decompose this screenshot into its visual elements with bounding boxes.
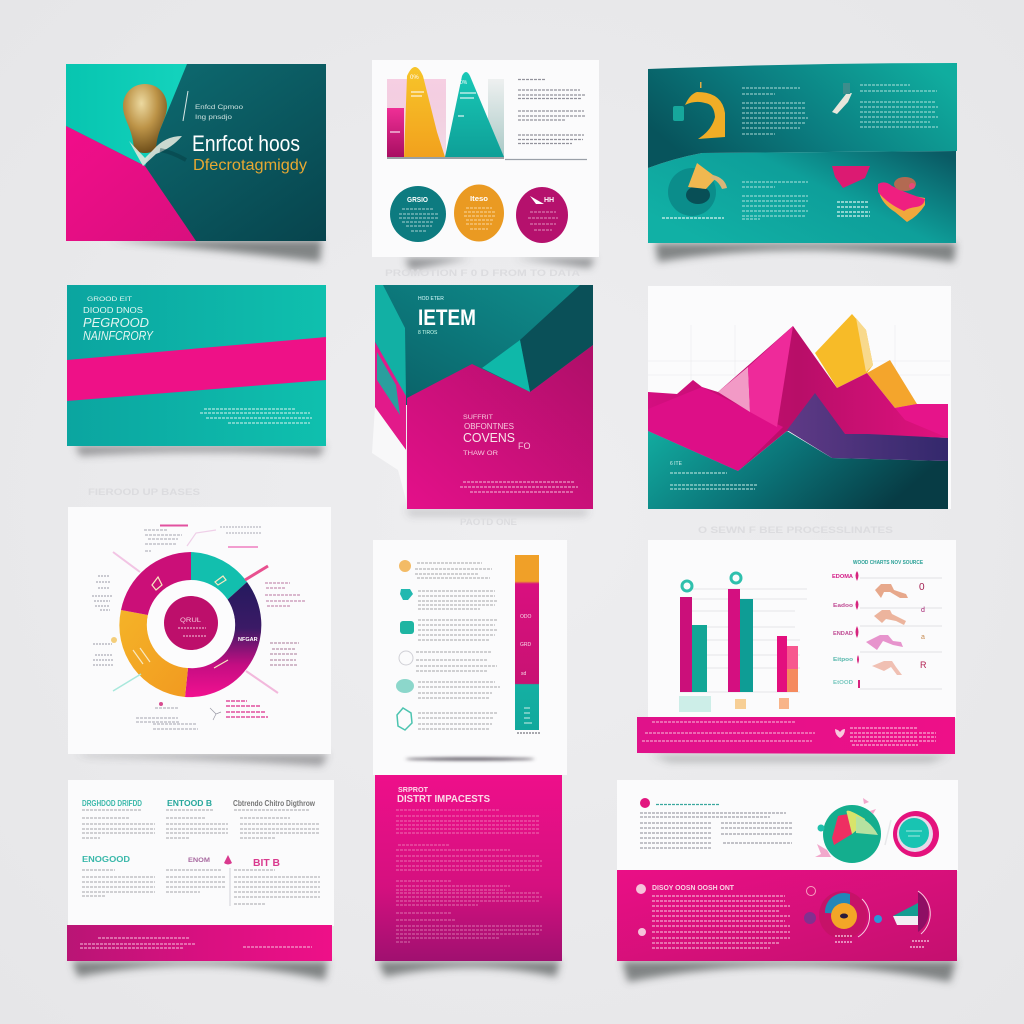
purple ridge xyxy=(787,393,948,461)
caption xyxy=(670,461,757,489)
panel: folded geometric cover xyxy=(372,285,593,509)
vertical bar: sd xyxy=(521,671,526,677)
vertical bar: ODO xyxy=(520,614,532,620)
panel: icon list with vertical bar xyxy=(373,540,567,775)
teal facet xyxy=(66,64,187,166)
vertical bar xyxy=(515,555,539,730)
title: OBFONTNES xyxy=(464,422,514,431)
column headings: ENTOOD B xyxy=(167,799,212,808)
right rows: a xyxy=(921,634,925,641)
right labels: EDOMA xyxy=(832,574,853,580)
side text xyxy=(518,80,586,144)
panel: magenta text slide xyxy=(375,775,562,961)
right labels xyxy=(832,574,854,686)
column headings: ENOM xyxy=(188,858,210,864)
heading: SRPROT xyxy=(398,787,429,794)
pie illustration xyxy=(815,798,881,863)
under-page shadow xyxy=(405,758,535,760)
panel: peaks and three circles xyxy=(372,60,599,257)
magenta band xyxy=(617,870,957,961)
panel: mountain chart xyxy=(648,286,951,509)
panel shadows xyxy=(72,240,956,982)
heading line xyxy=(656,804,720,806)
left fold xyxy=(372,342,406,500)
segment marks: NFGAR xyxy=(238,637,258,643)
right pink facet xyxy=(895,404,948,438)
slash accent xyxy=(183,91,188,121)
right heading: WOOD CHARTS NOV SOURCE xyxy=(853,560,923,566)
heading: NAINFCRORY xyxy=(83,328,154,343)
heading: PEGROOD xyxy=(83,315,149,330)
faint floating captions xyxy=(88,268,893,535)
circle: teal: GRSIO xyxy=(407,197,429,204)
right rows: d xyxy=(921,607,925,614)
left big facet xyxy=(648,387,783,471)
panel: split teal brochure xyxy=(648,63,957,243)
caption: 6 ITE xyxy=(670,461,683,467)
pale facet xyxy=(718,367,750,412)
peak chart: 0% xyxy=(460,80,468,86)
title: THAW OR xyxy=(463,451,499,457)
donut segments xyxy=(119,552,261,697)
peak chart: 0% xyxy=(410,75,419,81)
column headings: ENOGOOD xyxy=(82,855,130,864)
faint floating captions: PROMOTION F 0 D FROM TO DATA xyxy=(385,268,581,278)
panel: donut chart xyxy=(68,507,331,754)
callouts xyxy=(92,526,306,729)
column headings: DRGHDOD DRIFDD xyxy=(82,799,142,808)
title: COVENS xyxy=(463,430,515,445)
faint floating captions: O SEWN F BEE PROCESSLINATES xyxy=(698,525,893,535)
yellow peak xyxy=(815,314,873,388)
gridlines xyxy=(680,589,807,692)
upper text blocks xyxy=(742,85,938,134)
segment marks xyxy=(133,576,258,668)
pink facet xyxy=(748,326,793,427)
panel: three-column text slide xyxy=(67,780,334,961)
panel: teal banner with magenta stripe xyxy=(67,285,326,446)
icon: heart box xyxy=(878,177,925,222)
body text xyxy=(396,810,542,942)
icon: orange arc xyxy=(673,82,725,139)
bars xyxy=(680,589,798,692)
value badges xyxy=(682,573,741,591)
band text xyxy=(652,896,790,948)
panel: folded geometric cover: HOD ETER xyxy=(418,296,444,302)
panel: donut chart: QRUL xyxy=(180,618,202,624)
panel: title slide with bulb: Ing pnsdjo xyxy=(195,114,232,121)
right rows: 0 xyxy=(919,582,925,593)
band heading: DISOY OOSN OOSH ONT xyxy=(652,885,735,892)
heading xyxy=(397,787,490,805)
circle: orange: Iteso xyxy=(470,196,488,203)
heading: Enrfcot hoos xyxy=(192,131,300,156)
vertical bar: GRD xyxy=(520,642,532,648)
icon: brush xyxy=(832,83,852,114)
right labels: EtOOD xyxy=(833,680,853,686)
magenta stripe xyxy=(67,337,326,401)
title: SUFFRIT xyxy=(463,414,493,421)
orange peak xyxy=(867,360,917,408)
right rows xyxy=(856,571,942,689)
right labels: Eadoo xyxy=(833,603,854,609)
donut hub xyxy=(147,580,235,668)
column text xyxy=(82,810,320,904)
magenta ridge xyxy=(648,326,948,471)
heading: GROOD EIT xyxy=(87,297,132,303)
circle: teal xyxy=(390,186,446,242)
faint floating captions: PAOTD ONE xyxy=(460,517,517,527)
heading: DIOOD DNOS xyxy=(83,306,143,315)
icon: pink gem xyxy=(832,166,870,188)
magenta facet xyxy=(66,126,196,241)
light facet xyxy=(482,340,530,392)
panel: title slide with bulb xyxy=(66,64,326,241)
right rows: R xyxy=(920,660,927,670)
footer text xyxy=(642,722,936,745)
column headings: BIT B xyxy=(253,858,280,869)
heading: IETEM xyxy=(418,305,476,330)
body text xyxy=(460,482,578,492)
circle: magenta: HH xyxy=(544,197,554,204)
panel: bar chart and magenta footer xyxy=(637,540,956,754)
heading: DISTRT IMPACESTS xyxy=(397,794,490,805)
upper text xyxy=(640,813,792,848)
icon: pink blob xyxy=(640,798,650,808)
subtitle: Enfcd Cpmoo xyxy=(195,104,243,111)
icon: pink marker xyxy=(224,855,232,864)
wedge illustration xyxy=(893,891,930,947)
circle: orange xyxy=(454,184,504,242)
column headings: Cbtrendo Chitro Digthrow xyxy=(233,799,316,808)
panel: folded geometric cover: 8 TIROS xyxy=(418,330,438,336)
teal base xyxy=(648,431,948,509)
faint floating captions: FIEROOD UP BASES xyxy=(88,487,200,497)
title xyxy=(463,414,530,457)
connector lines xyxy=(113,552,140,572)
title: FO xyxy=(518,441,530,451)
footer text xyxy=(80,938,312,948)
list text xyxy=(415,563,500,729)
light teal fold xyxy=(375,285,406,398)
dark facet xyxy=(520,285,593,392)
peak chart xyxy=(387,67,504,159)
body text xyxy=(200,409,312,423)
magenta footer xyxy=(67,925,332,961)
donut illustration xyxy=(804,886,882,942)
target circle xyxy=(893,811,939,857)
magenta footer band xyxy=(637,717,955,754)
icon: teal bowl with gold xyxy=(668,163,727,216)
subheading: Dfecrotagmigdy xyxy=(193,157,307,174)
heading xyxy=(83,297,154,343)
bar footers xyxy=(679,696,789,712)
column headings xyxy=(82,799,316,869)
panel: pies and magenta lower band xyxy=(617,780,958,961)
band icons xyxy=(636,884,646,936)
icons xyxy=(396,560,414,730)
right labels: Eitpoo xyxy=(833,657,854,663)
right labels: ENDAD xyxy=(833,631,853,637)
circle: magenta xyxy=(516,187,568,243)
icon: gold light bulb xyxy=(123,84,186,166)
magenta body xyxy=(407,345,593,509)
lower text blocks xyxy=(662,182,870,219)
